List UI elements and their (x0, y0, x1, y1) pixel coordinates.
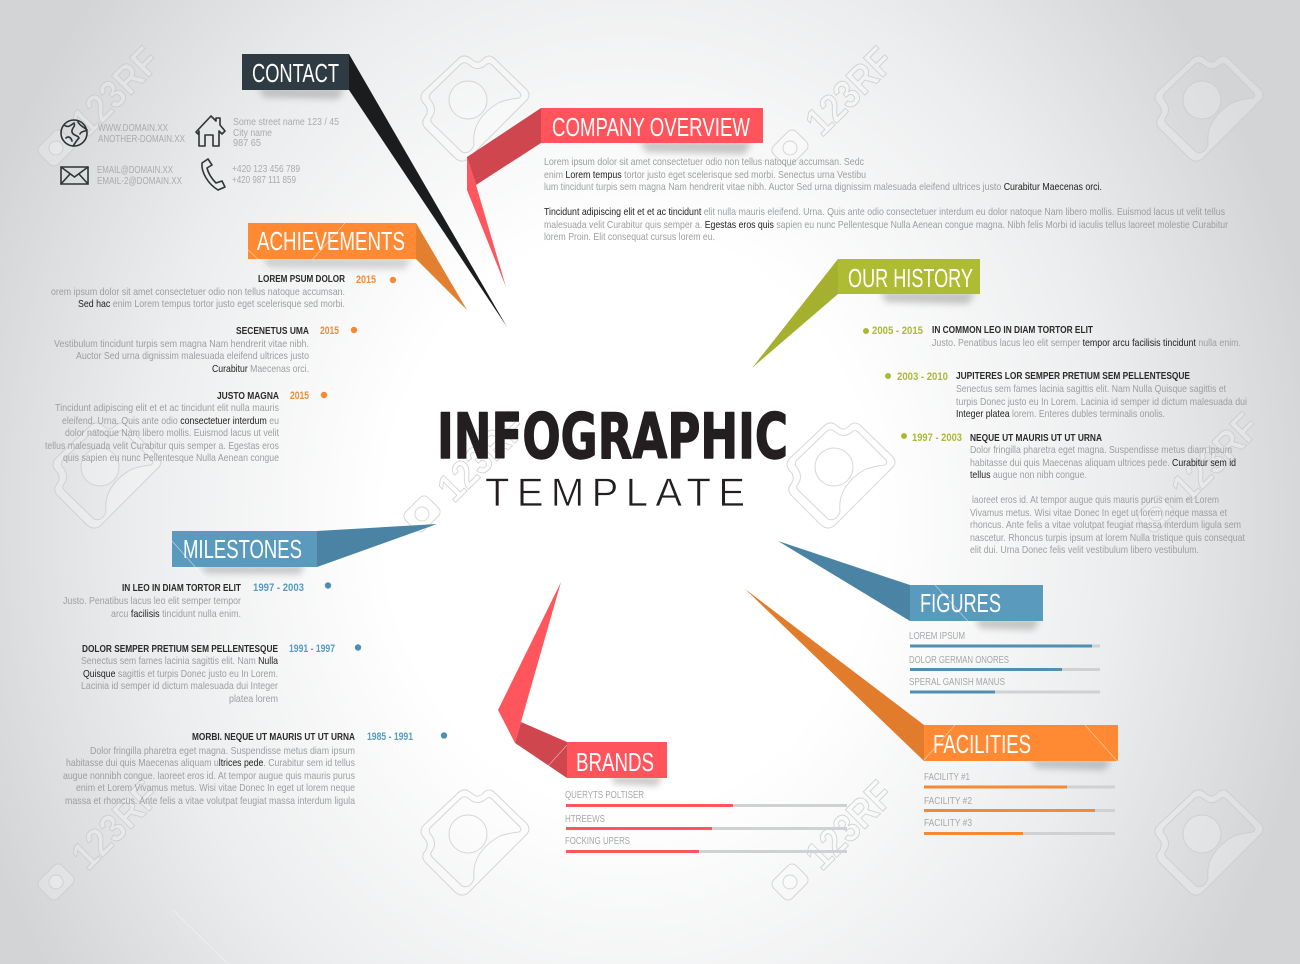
history item 3: Vivamus metus. Wisi vitae Donec In eget ut lorem neque massa et (970, 507, 1227, 519)
overview text (544, 156, 1228, 243)
contact address text: City name (233, 127, 272, 139)
contact web text (98, 122, 185, 145)
history item 3: elit dui. Urna Donec felis velit vestibulum libero vestibulum. (970, 544, 1199, 556)
achievement item 1 (51, 273, 396, 310)
contact phone text (232, 163, 300, 186)
facilities bar 2: FACILITY #2 (924, 795, 972, 807)
milestone item 2: DOLOR SEMPER PRETIUM SEM PELLENTESQUE (82, 643, 278, 655)
title (437, 400, 788, 515)
history item 2 (885, 370, 1247, 420)
history item 3: laoreet eros id. At tempor augue quis mauris purus enim et Lorem (972, 494, 1219, 506)
overview text: Lorem ipsum dolor sit amet consectetuer odio non tellus natoque accumsan. Sedc (544, 156, 864, 168)
history item 3: nascetur. Rhoncus turpis ipsum at lorem Nulla tristique quis consequat (970, 532, 1245, 544)
achievement item 1: 2015 (356, 274, 376, 286)
history item 2: turpis Donec justo eu In Lorem. Lacinia id semper id dictum malesuada dui (956, 396, 1247, 408)
milestone item 2: Lacinia id semper id dictum malesuada dui Integer (81, 680, 278, 692)
milestone item 3: augue nonnibh congue. laoreet eros id. At tempor augue quis mauris purus (63, 770, 355, 782)
milestones pointer (317, 524, 437, 567)
history item 2: 2003 - 2010 (897, 371, 948, 383)
achievement item 2: Curabitur Maecenas orci. (212, 363, 309, 375)
panel: our history (752, 259, 1247, 556)
contact email text: EMAIL-2@DOMAIN.XX (97, 175, 182, 187)
contact web text: ANOTHER-DOMAIN.XX (98, 133, 185, 145)
watermarks: 123RF (1163, 405, 1269, 510)
milestone item 3 (63, 731, 447, 807)
history item 2: JUPITERES LOR SEMPER PRETIUM SEM PELLENTESQUE (956, 370, 1190, 382)
history item 2: Senectus sem fames lacinia sagittis elit. Nam Nulla Quisque sagittis et (956, 383, 1226, 395)
contact email text (97, 164, 182, 187)
achievement item 3 (45, 390, 327, 464)
facilities bar 2 (924, 795, 1115, 812)
milestone item 1: arcu facilisis tincidunt nulla enim. (111, 608, 241, 620)
contact address text: Some street name 123 / 45 (233, 116, 339, 128)
contact heading: CONTACT (252, 58, 339, 88)
history pointer (752, 259, 838, 368)
history item 3: tellus augue non nibh congue. (970, 469, 1087, 481)
contact phone text: +420 987 111 859 (232, 174, 296, 186)
history item 2: Integer platea lorem. Enteres dubles terminalis onolis. (956, 408, 1165, 420)
subtitle: TEMPLATE (485, 471, 745, 515)
panel: achievements (45, 223, 467, 464)
figures bar 1: LOREM IPSUM (909, 630, 965, 642)
history item 1: 2005 - 2015 (872, 325, 923, 337)
milestone item 1: 1997 - 2003 (253, 582, 304, 594)
icon: envelope (61, 167, 88, 184)
contact address text: 987 65 (233, 137, 261, 149)
overview heading (541, 108, 763, 143)
facilities bar 3 (924, 817, 1115, 835)
contact address text (233, 116, 339, 149)
overview text: lorem Proin. Elit consequat cursus lorem eu. (544, 231, 715, 243)
icon: globe (61, 120, 87, 146)
history item 3: Dolor fringilla pharetra eget magna. Suspendisse metus diam ipsum (970, 444, 1232, 456)
contact heading (242, 54, 349, 90)
figures bar 3: SPERAL GANISH MANUS (909, 676, 1005, 688)
figures heading: FIGURES (920, 588, 1001, 618)
milestone item 3: enim et Lorem Vivamus metus. Wisi vitae Donec In eget ut lorem neque (76, 782, 355, 794)
achievement item 1: LOREM PSUM DOLOR (258, 273, 345, 285)
panel: figures (778, 541, 1100, 694)
watermarks: 123RF (63, 773, 169, 878)
panel: milestones (63, 524, 447, 807)
icon: phone (202, 159, 225, 190)
history item 3: rhoncus. Ante felis a vitae volutpat feugiat massa interdum ligula sem (970, 519, 1241, 531)
achievement item 2: Auctor Sed urna dignissim malesuada eleifend ultrices justo (76, 350, 309, 362)
achievement item 3: JUSTO MAGNA (217, 390, 279, 402)
watermarks: 123RF (797, 39, 903, 144)
facilities bar 1 (924, 771, 1115, 788)
facilities pointer (745, 589, 924, 761)
milestone item 3: habitasse dui quis Maecenas aliquam ultrices pede. Curabitur sem id tellus (66, 757, 355, 769)
overview pointer (467, 108, 541, 287)
achievement item 3: Tincidunt adipiscing elit et et ac tincidunt elit nulla mauris (55, 402, 279, 414)
milestone item 3: 1985 - 1991 (367, 731, 413, 743)
brands pointer (498, 582, 567, 778)
achievement item 3: quis sapien eu nunc Pellentesque Nulla Aenean congue (63, 452, 279, 464)
facilities heading: FACILITIES (933, 729, 1031, 759)
brands bar 2 (565, 813, 847, 830)
achievements heading (248, 223, 416, 259)
milestone item 1 (63, 582, 331, 620)
overview text: lum tincidunt turpis sem magna Nam hendrerit vitae nibh. Auctor Sed urna dignissim malesuada eleifend ultrices justo Curabitur Maecenas orci. (544, 181, 1102, 193)
achievement item 3: eleifend. Urna. Quis ante odio consectetuer interdum eu (62, 415, 279, 427)
panel: facilities (745, 589, 1118, 835)
history heading (838, 259, 980, 294)
milestone item 2: 1991 - 1997 (289, 643, 335, 655)
achievements pointer (416, 223, 467, 310)
figures bar 2: DOLOR GERMAN ONORES (909, 654, 1009, 666)
achievement item 3: tellus malesuada velit Curabitur quis semper a. Egestas eros (45, 440, 279, 452)
milestone item 2: Quisque sagittis et turpis Donec justo eu In Lorem. (83, 668, 278, 680)
milestones heading (172, 531, 317, 567)
history item 1 (863, 324, 1241, 349)
milestone item 3: Dolor fringilla pharetra eget magna. Suspendisse metus diam ipsum (90, 745, 355, 757)
milestone item 3: massa et rhoncus. Ante felis a vitae volutpat feugiat massa interdum ligula (65, 795, 355, 807)
watermarks: 123RF (797, 773, 903, 878)
achievement item 3: 2015 (290, 390, 309, 402)
achievement item 2: SECENETUS UMA (236, 325, 309, 337)
achievement item 2 (54, 325, 357, 375)
brands bar 3: FOCKING UPERS (565, 835, 630, 847)
milestone item 2 (81, 643, 361, 705)
contact web text: WWW.DOMAIN.XX (98, 122, 168, 134)
history item 3 (901, 432, 1245, 556)
milestone item 2: Senectus sem fames lacinia sagittis elit. Nam Nulla (81, 655, 278, 667)
watermarks: 123RF (63, 39, 169, 144)
achievement item 1: Sed hac enim Lorem tempus tortor justo eget scelerisque sed morbi. (78, 298, 345, 310)
milestone item 3: MORBI. NEQUE UT MAURIS UT UT URNA (192, 731, 355, 743)
figures bar 3 (909, 676, 1100, 694)
facilities bar 3: FACILITY #3 (924, 817, 972, 829)
achievement item 3: dolor natoque Nam libero mollis. Euismod lacus ut velit (65, 427, 279, 439)
contact phone text: +420 123 456 789 (232, 163, 300, 175)
title: INFOGRAPHIC (437, 400, 788, 473)
achievement item 2: 2015 (320, 325, 339, 337)
brands bar 2: HTREEWS (565, 813, 605, 825)
contact pointer (349, 54, 507, 327)
watermarks: 123RF (429, 405, 535, 510)
panel: brands (498, 582, 847, 853)
brands bar 1: QUERYTS POLTISER (565, 789, 644, 801)
brands bar 1 (565, 789, 847, 807)
achievement item 2: Vestibulum tincidunt turpis sem magna Nam hendrerit vitae nibh. (54, 338, 309, 350)
history heading: OUR HISTORY (848, 263, 973, 293)
figures bar 1 (909, 630, 1100, 648)
overview heading: COMPANY OVERVIEW (552, 112, 750, 142)
facilities bar 1: FACILITY #1 (924, 771, 970, 783)
achievements heading: ACHIEVEMENTS (257, 226, 405, 256)
milestones heading: MILESTONES (183, 534, 302, 564)
milestone item 2: platea lorem (229, 693, 278, 705)
overview text: malesuada velit Curabitur quis semper a. Egestas eros quis sapien eu nunc Pellentesque Nulla Aenean congue magna. Nibh felis Morbi id iaculis tellus laoreet molestie Curabitur (544, 219, 1228, 231)
history item 3: habitasse dui quis Maecenas aliquam ultrices pede. Curabitur sem id (970, 457, 1236, 469)
history item 1: IN COMMON LEO IN DIAM TORTOR ELIT (932, 324, 1093, 336)
history item 1: Justo. Penatibus lacus leo elit semper tempor arcu facilisis tincidunt nulla enim. (932, 337, 1241, 349)
panel: contact (61, 54, 507, 327)
facilities heading (924, 725, 1118, 761)
figures bar 2 (909, 654, 1100, 671)
milestone item 1: Justo. Penatibus lacus leo elit semper tempor (63, 595, 241, 607)
overview text: enim Lorem tempus tortor justo eget scelerisque sed morbi. Senectus urna Vestibu (544, 169, 866, 181)
brands bar 3 (565, 835, 847, 853)
icon: house (196, 116, 225, 146)
contact email text: EMAIL@DOMAIN.XX (97, 164, 173, 176)
history item 3: 1997 - 2003 (912, 432, 962, 444)
history item 3: NEQUE UT MAURIS UT UT URNA (970, 432, 1102, 444)
panel: company overview (467, 108, 1228, 287)
brands heading: BRANDS (576, 747, 654, 777)
milestone item 1: IN LEO IN DIAM TORTOR ELIT (122, 582, 241, 594)
figures pointer (778, 541, 910, 621)
brands heading (567, 742, 667, 778)
achievement item 1: orem ipsum dolor sit amet consectetuer odio non tellus natoque accumsan. (51, 286, 345, 298)
